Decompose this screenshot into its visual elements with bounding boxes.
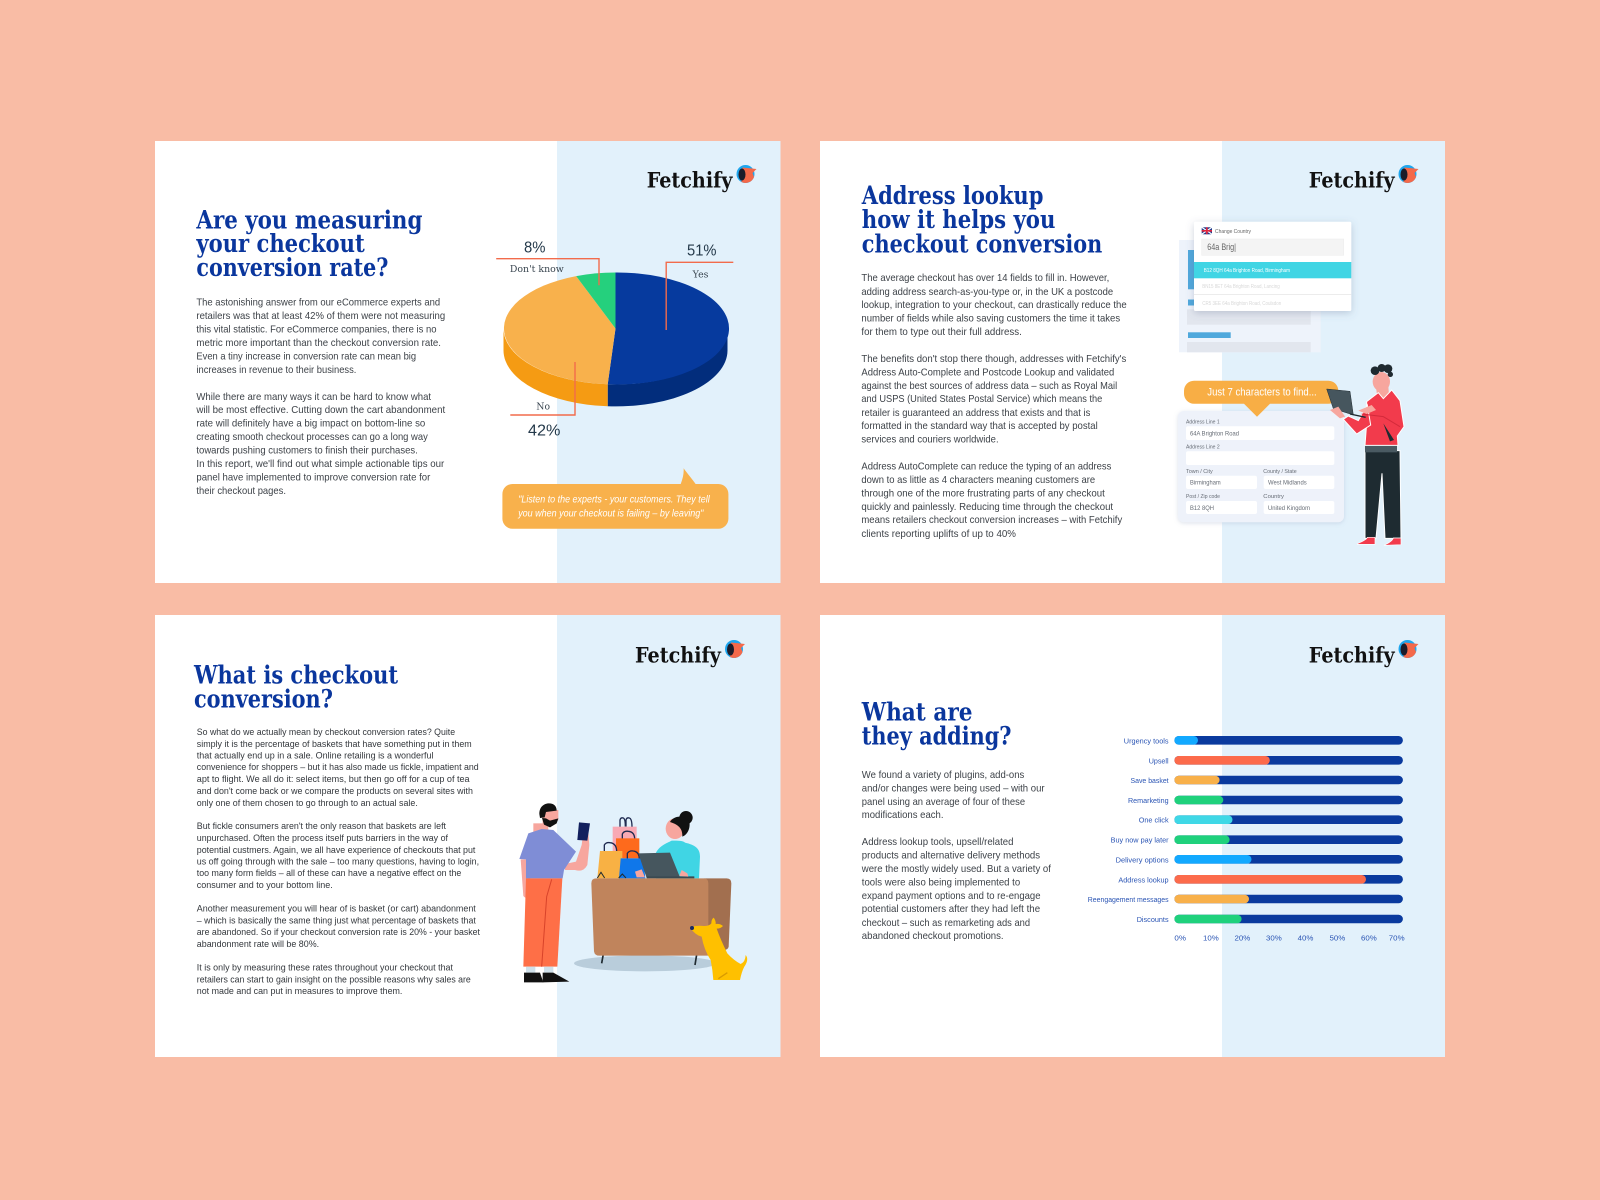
body text: this vital statistic. For eCommerce companies, there is no [196, 324, 437, 336]
body text: But fickle consumers aren't the only reason that baskets are left [197, 821, 446, 832]
callout: 8% don't know: Don't know [510, 265, 564, 275]
body text: towards pushing customers to finish their purchases. [196, 444, 418, 456]
callout: 42% no [510, 362, 575, 439]
body text: increases in revenue to their business. [196, 364, 356, 376]
callout: 51% yes: 51% [687, 242, 717, 259]
address form card: Country [1263, 494, 1284, 500]
body text: lookup, integration to your checkout, can drastically reduce the [861, 299, 1127, 311]
heading [861, 698, 1012, 751]
bar: buy now pay later: Buy now pay later [1111, 836, 1169, 845]
body text: formatted in the standard way that is accepted by postal [861, 420, 1098, 432]
speech bubble: just 7 characters: Just 7 characters to find... [1207, 386, 1317, 398]
body text: too many form fields – all of these can have a negative effect on the [197, 868, 461, 879]
background checkout form [1179, 240, 1321, 352]
bar: remarketing: Remarketing [1128, 796, 1169, 805]
body text: against the best sources of address data – such as Royal Mail [861, 380, 1117, 392]
shopping bags [597, 818, 645, 878]
x axis labels: 40% [1298, 933, 1314, 942]
woman [635, 811, 700, 878]
body text: convenience for shoppers – but it has also made us fickle, impatient and [197, 762, 479, 773]
illustration: shoppers at counter with dog [519, 803, 747, 982]
body text: and/or changes were being used – with our [862, 782, 1045, 794]
body text: expand payment options and to re-engage [862, 890, 1041, 902]
callout: 42% no: 42% [528, 422, 561, 439]
man with phone [519, 803, 590, 982]
bar: urgency tools: Urgency tools [1124, 736, 1169, 745]
body text: for them to type out their full address. [861, 326, 1022, 338]
body text: clients reporting uplifts of up to 40% [861, 528, 1016, 540]
body text: retailers can start to gain insight on the possible reasons why sales are [197, 974, 471, 986]
x axis labels: 30% [1266, 933, 1282, 942]
body text: abandonment rate will be 80%. [197, 939, 319, 950]
body text: Even a tiny increase in conversion rate can mean big [196, 350, 416, 362]
panel: what are they adding [820, 615, 1445, 1057]
body text: will be most effective. Cutting down the cart abandonment [195, 404, 445, 416]
body text: us off going through with the sale – too many questions, having to login, [197, 856, 479, 868]
x axis labels: 60% [1361, 933, 1377, 942]
panel: address lookup [820, 141, 1445, 583]
callout: 8% don't know: 8% [524, 240, 546, 257]
illustration: man with laptop [1327, 364, 1404, 545]
logo: Fetchify: Fetchify [1309, 168, 1395, 193]
address form card: United Kingdom [1268, 505, 1310, 512]
bar: discounts [1137, 915, 1403, 924]
bar: address lookup [1118, 875, 1403, 884]
address dropdown card: B12 8QH 64a Brighton Road, Birmingham [1204, 268, 1290, 274]
heading: checkout conversion [862, 229, 1102, 258]
x axis labels [1174, 933, 1405, 942]
body text: simply it is the percentage of baskets that have something put in them [197, 739, 472, 750]
body text: Address AutoComplete can reduce the typing of an address [861, 460, 1111, 472]
bar: reengagement messages: Reengagement messages [1088, 895, 1169, 904]
heading [861, 181, 1102, 258]
heading [193, 660, 398, 713]
bar: remarketing [1128, 796, 1403, 805]
address dropdown card [1194, 222, 1351, 311]
x axis labels: 20% [1234, 933, 1251, 942]
body text: retailers was that at least 42% of them were not measuring [196, 310, 445, 322]
bar: upsell: Upsell [1149, 756, 1169, 765]
body text: quickly and painlessly. Reducing time through the checkout [861, 501, 1113, 513]
callout: 8% don't know [496, 240, 599, 285]
speech bubble: just 7 characters [1184, 381, 1338, 417]
body text: The astonishing answer from our eCommerce experts and [196, 296, 440, 308]
speech bubble quote: "Listen to the experts - your customers. They tell [518, 495, 710, 506]
body text: products and alternative delivery methods [862, 850, 1040, 862]
body text: their checkout pages. [196, 485, 286, 497]
bar: buy now pay later [1111, 835, 1403, 845]
bar: delivery options [1116, 855, 1403, 864]
bar: address lookup: Address lookup [1118, 875, 1169, 884]
heading: Are you measuring [196, 205, 422, 234]
body text: potential customers after they had left the [862, 903, 1040, 915]
bar: urgency tools [1124, 736, 1403, 745]
body text: checkout – such as remarketing ads and [862, 917, 1030, 929]
body text: tools were also being implemented to [862, 876, 1020, 888]
body text: means retailers checkout conversion increases – with Fetchify [861, 514, 1123, 526]
body text: panel have implemented to improve conversion rate for [196, 472, 431, 484]
dog [690, 918, 747, 980]
body text: panel using an average of four of these [862, 796, 1025, 808]
address form card: 64A Brighton Road [1190, 430, 1239, 437]
body text: potential custmers. Again, we all have experience of checkouts that put [197, 845, 476, 856]
body text: Another measurement you will hear of is basket (or cart) abandonment [197, 904, 476, 914]
address form card [1178, 411, 1344, 522]
logo: Fetchify: Fetchify [647, 168, 733, 193]
bar: one click [1139, 815, 1403, 825]
address dropdown card: BN15 8ET 64a Brighton Road, Lancing [1202, 284, 1280, 290]
body text [195, 296, 445, 497]
body text: were the mostly widely used. But a variety of [861, 863, 1051, 875]
body text: consumer and to your bottom line. [197, 880, 333, 891]
heading: conversion? [194, 684, 333, 713]
body text: creating smooth checkout processes can go a long way [196, 431, 428, 443]
heading: your checkout [196, 229, 365, 258]
body text: We found a variety of plugins, add-ons [862, 769, 1024, 781]
callout: 51% yes [666, 242, 733, 330]
body text: that actually end up in a sale. Online retailing is a wonderful [197, 750, 434, 762]
body text: modifications each. [862, 809, 944, 821]
bar: reengagement messages [1088, 895, 1403, 904]
address dropdown card: Change Country [1215, 229, 1251, 235]
body text [197, 727, 480, 997]
body text: adding address search-as-you-type or, in the UK a postcode [861, 286, 1113, 298]
body text: While there are many ways it can be hard to know what [196, 391, 431, 403]
body text: unpurchased. Often the process itself puts barriers in the way of [197, 833, 448, 844]
heading: conversion rate? [196, 253, 388, 282]
address form card: County / State [1263, 469, 1297, 475]
callout: 51% yes: Yes [692, 271, 709, 281]
heading: they adding? [862, 722, 1012, 751]
panel: are you measuring [155, 141, 780, 583]
bar: discounts: Discounts [1137, 915, 1169, 924]
panel: what is checkout conversion [155, 615, 780, 1057]
body text: down to as little as 4 characters meaning customers are [861, 474, 1095, 486]
address form card: Address Line 1 [1186, 420, 1220, 426]
body text: only one of them chosen to go through to an actual sale. [197, 798, 418, 809]
body text: metric more important than the checkout conversion rate. [196, 337, 441, 349]
address form card: Post / Zip code [1186, 494, 1220, 500]
body text: It is only by measuring these rates throughout your checkout that [197, 962, 453, 974]
body text: Address lookup tools, upsell/related [862, 836, 1014, 848]
heading: What are [861, 698, 972, 727]
bar: save basket: Save basket [1130, 776, 1169, 785]
address dropdown card: 64a Brig| [1207, 242, 1236, 252]
body text: not made and can put in measures to improve them. [197, 986, 402, 997]
address form card: Town / City [1186, 469, 1213, 475]
bar chart [1088, 736, 1405, 942]
speech bubble quote [502, 468, 728, 529]
logo: Fetchify: Fetchify [1309, 643, 1395, 668]
counter desk [591, 878, 731, 956]
bar: save basket [1130, 776, 1403, 785]
address form card: Birmingham [1190, 479, 1221, 486]
body text: abandoned checkout promotions. [862, 930, 1004, 942]
body text: The average checkout has over 14 fields to fill in. However, [861, 272, 1109, 284]
body text: The benefits don't stop there though, addresses with Fetchify's [861, 353, 1126, 365]
body text: So what do we actually mean by checkout conversion rates? Quite [197, 727, 455, 738]
bar: delivery options: Delivery options [1116, 855, 1169, 864]
body text: are abandoned. So if your checkout conversion rate is 20% - your basket [197, 927, 480, 938]
body text: and don't come back or we compare the products on several sites with [197, 786, 473, 797]
body text: Address Auto-Complete and Postcode Lookup and validated [861, 366, 1114, 378]
bar: one click: One click [1139, 816, 1169, 825]
speech bubble quote: you when your checkout is failing – by leaving" [517, 508, 704, 519]
pie chart [496, 240, 733, 439]
body text: number of fields while also saving customers the time it takes [861, 312, 1120, 324]
heading: What is checkout [193, 660, 398, 689]
x axis labels: 70% [1389, 933, 1405, 942]
body text: services and couriers worldwide. [861, 434, 999, 446]
body text: retailer is guaranteed an address that exists and that is [861, 407, 1090, 419]
body text: apt to flight. We all do it: select items, but then go off for a cup of tea [197, 774, 470, 785]
icon: UK flag [1202, 227, 1212, 234]
x axis labels: 10% [1203, 933, 1219, 942]
heading: how it helps you [862, 205, 1055, 234]
address form card: B12 8QH [1190, 505, 1214, 512]
logo: Fetchify: Fetchify [635, 643, 721, 668]
x axis labels: 0% [1174, 933, 1186, 942]
address form card: West Midlands [1268, 479, 1307, 486]
x axis labels: 50% [1330, 933, 1346, 942]
heading: Address lookup [861, 181, 1043, 210]
body text: and USPS (United States Postal Service) which means the [861, 393, 1102, 405]
body text [861, 272, 1127, 540]
body text: rate will definitely have a big impact on bottom-line so [196, 418, 425, 430]
callout: 42% no: No [536, 403, 550, 413]
body text: In this report, we'll find out what simple actionable tips our [196, 458, 445, 470]
heading [196, 205, 422, 282]
address dropdown card: CR5 3EE 64a Brighton Road, Coulsdon [1202, 301, 1281, 307]
bar: upsell [1149, 756, 1403, 765]
body text: – which is basically the same thing just what percentage of baskets that [197, 916, 476, 926]
body text [861, 769, 1051, 942]
address form card: Address Line 2 [1186, 445, 1220, 451]
body text: through one of the more frustrating parts of any checkout [861, 488, 1105, 500]
